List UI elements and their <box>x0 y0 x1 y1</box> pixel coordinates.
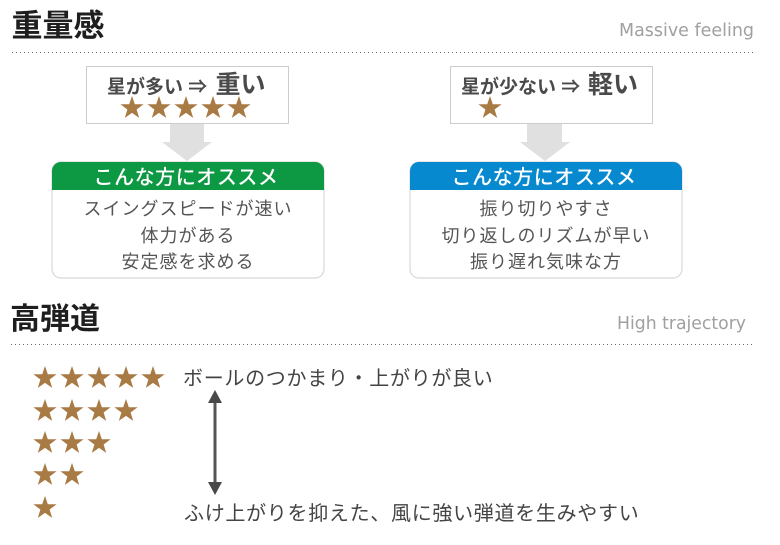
text: low end description: ふけ上がりを抑えた、風に強い弾道を生みやすい <box>184 502 639 525</box>
body text: light recommendations: 振り遅れ気味な方 <box>470 252 622 272</box>
subtitle: Massive feeling: Massive feeling <box>619 20 754 41</box>
arrow: double headed vertical <box>208 390 222 495</box>
panel: green recommendation card <box>52 162 324 278</box>
body text: heavy recommendations: 安定感を求める <box>122 252 254 272</box>
header bar: blue <box>410 162 682 190</box>
subtitle: High trajectory: High trajectory <box>617 313 746 334</box>
label: 星が多い ⇒ 重い: 星が多い ⇒ <box>107 77 207 98</box>
body text: light recommendations: 振り切りやすさ <box>480 199 612 219</box>
body text: heavy recommendations: 体力がある <box>140 226 236 246</box>
arrow: light down <box>520 124 570 161</box>
panel: blue recommendation card <box>410 162 682 278</box>
body text: heavy recommendations: スイングスピードが速い <box>84 199 292 219</box>
panel: many stars means heavy <box>86 66 288 124</box>
body text: light recommendations <box>442 199 650 272</box>
header text: こんな方にオススメ <box>94 166 278 189</box>
rating: one star <box>478 96 502 118</box>
label: 星が少ない ⇒ 軽い: 軽い <box>588 71 638 99</box>
body text: heavy recommendations <box>84 199 292 272</box>
header bar: green <box>52 162 324 190</box>
heading: high trajectory section <box>10 303 746 336</box>
body text: light recommendations: 切り返しのリズムが早い <box>442 226 650 246</box>
panel: few stars means light <box>450 66 652 124</box>
rating ladder: five rows of stars <box>33 366 165 518</box>
label: 星が多い ⇒ 重い: 重い <box>216 71 266 99</box>
heading: massive feeling section <box>12 8 754 44</box>
header text: こんな方にオススメ <box>452 166 636 189</box>
rating: five stars <box>120 96 251 118</box>
label: 星が少ない ⇒ 軽い: 星が少ない ⇒ <box>461 77 580 98</box>
text: high end description: ボールのつかまり・上がりが良い <box>183 367 494 390</box>
title: 重量感: 重量感 <box>12 8 104 44</box>
arrow: heavy down <box>162 124 212 161</box>
title: 高弾道: 高弾道 <box>10 303 100 336</box>
